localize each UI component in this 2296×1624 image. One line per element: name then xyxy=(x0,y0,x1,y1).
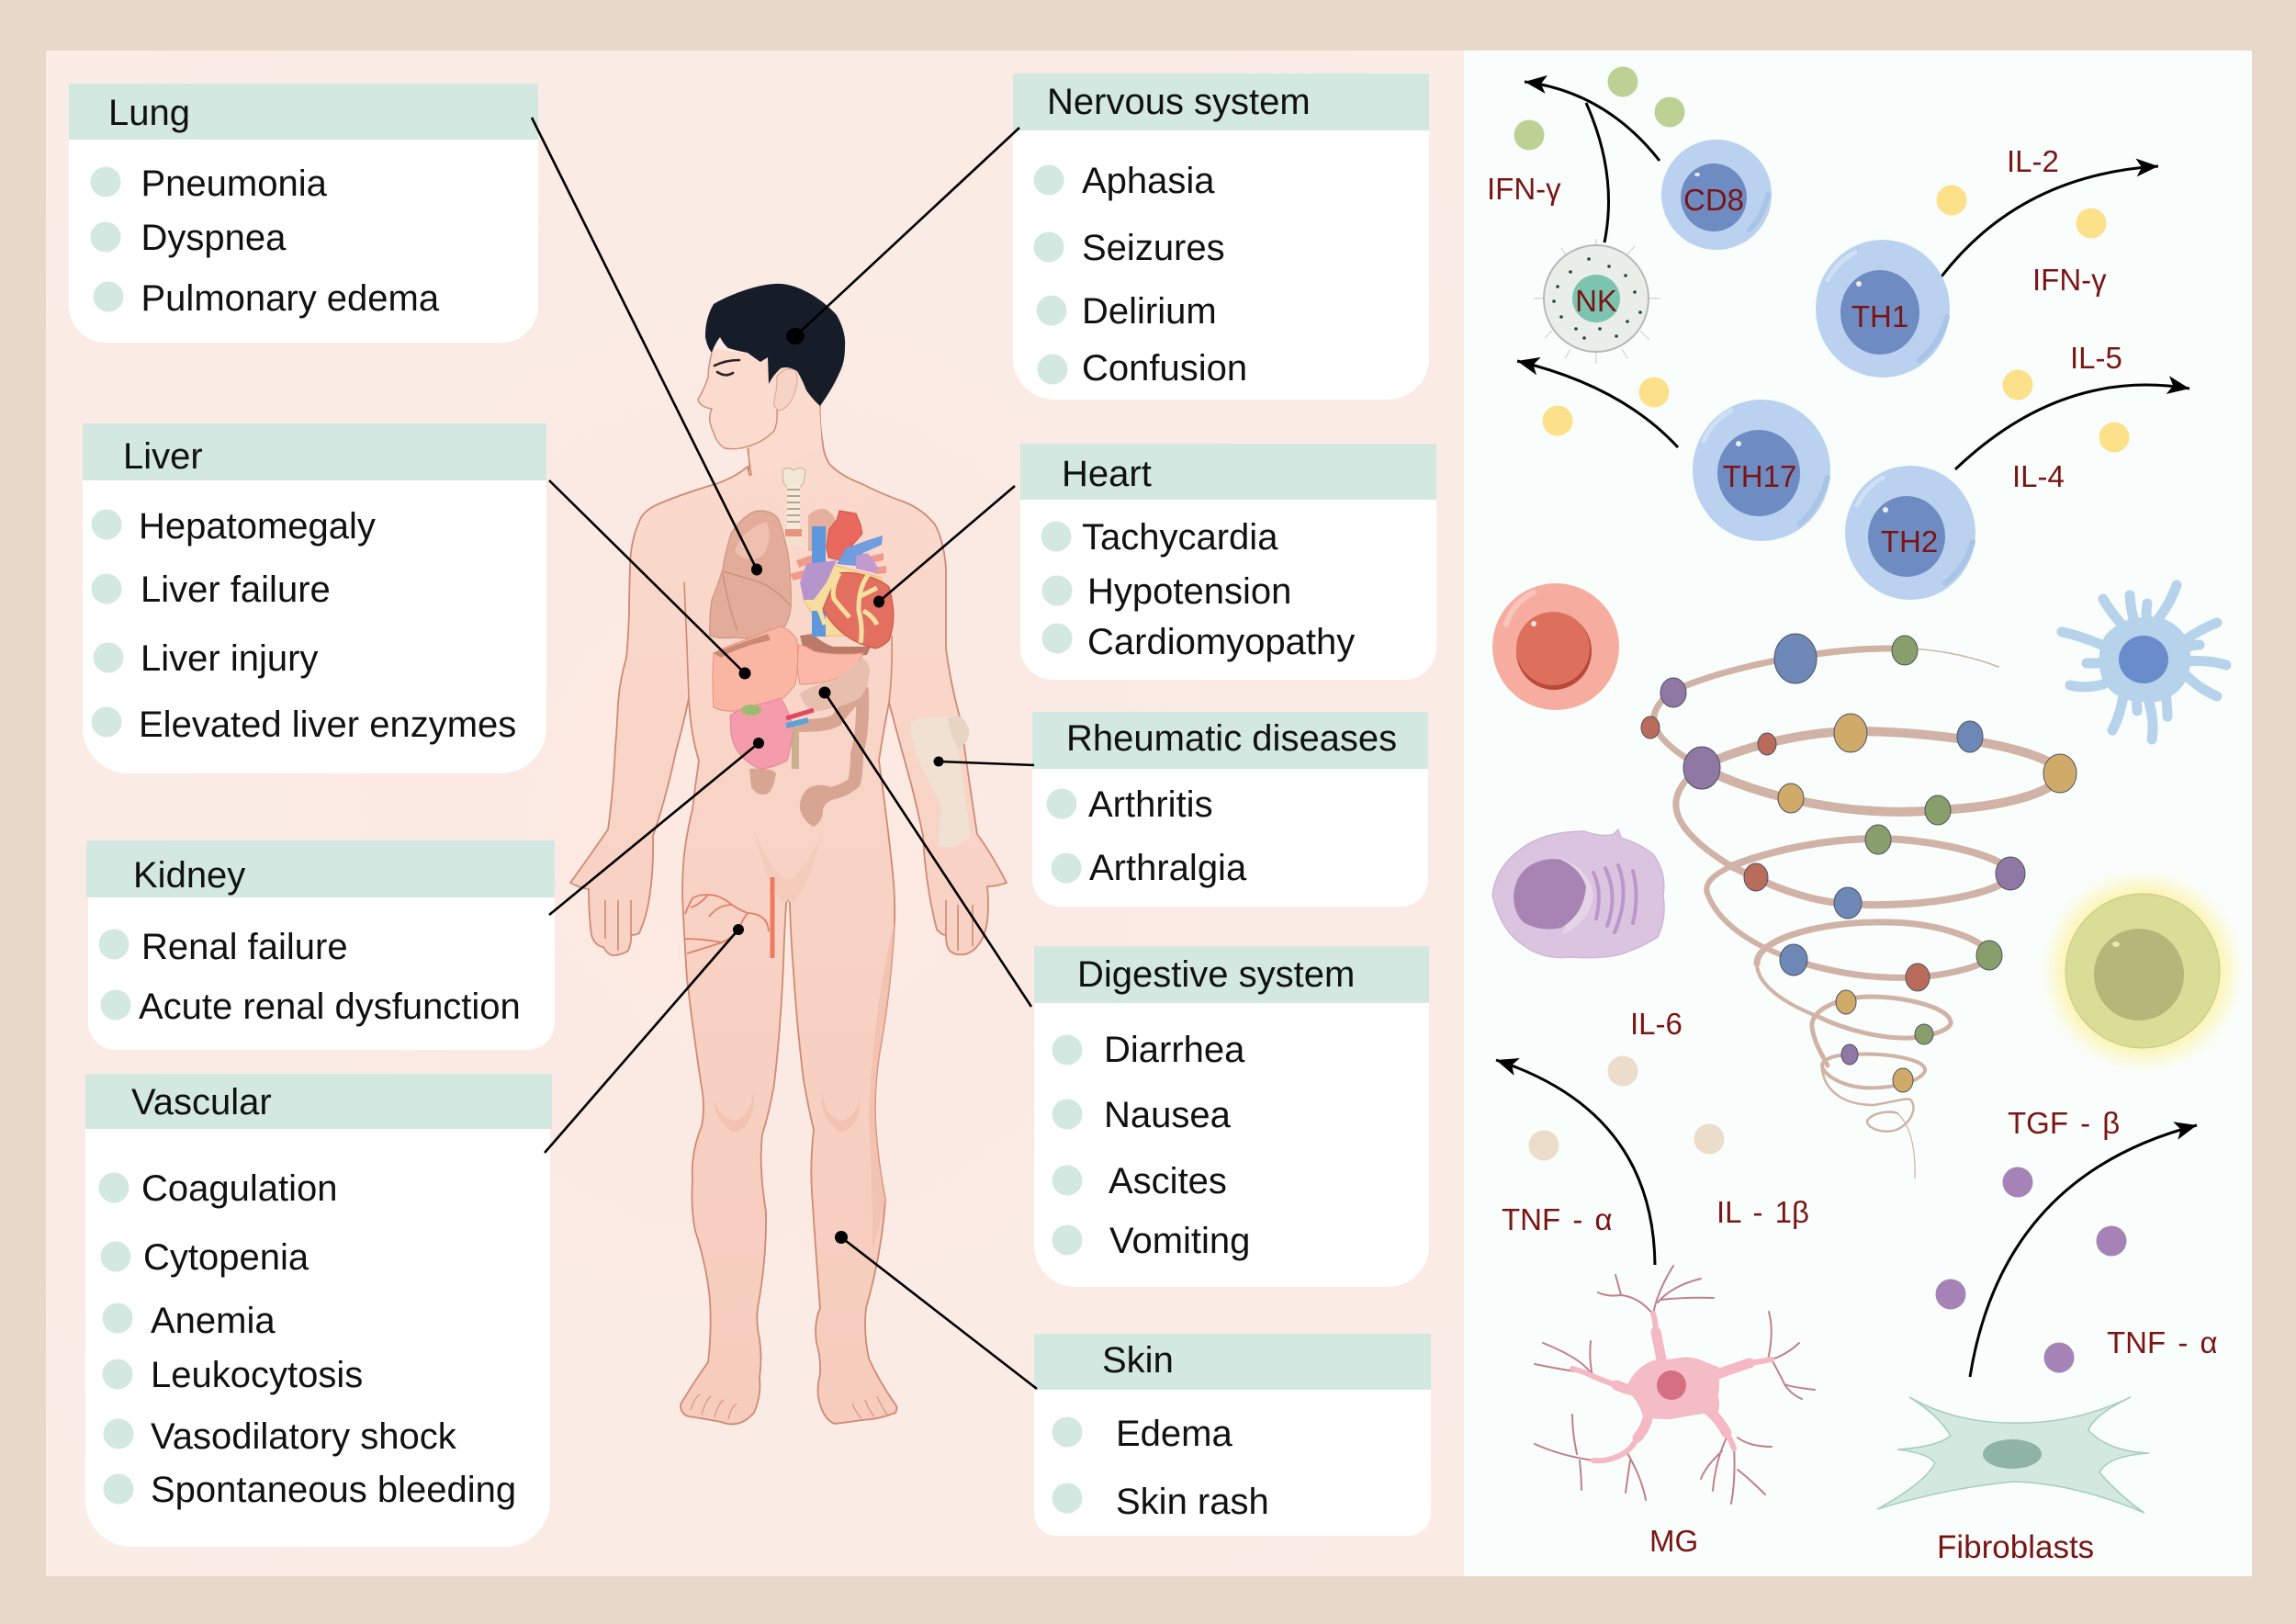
cell: CD8: CD8 xyxy=(1683,183,1744,217)
cytokine label: IFN-γ left: IFN-γ xyxy=(1487,172,1561,206)
card: Lung: Pulmonary edema xyxy=(141,278,440,319)
cytokine dots: beige xyxy=(1528,1056,1725,1161)
armpit and finger lines xyxy=(605,582,973,951)
kidney and vessels xyxy=(730,698,814,769)
card: Lung xyxy=(69,84,538,343)
card: Digestive system: Digestive system xyxy=(1077,954,1355,995)
cell: dendritic xyxy=(2062,585,2226,739)
card: Heart: Tachycardia xyxy=(1082,517,1278,558)
leg vessel xyxy=(685,877,775,958)
cell: TH17: TH17 xyxy=(1723,459,1796,493)
card: Vascular: Anemia xyxy=(151,1301,276,1341)
card: Nervous system: Confusion xyxy=(1082,348,1247,389)
card: Heart: Hypotension xyxy=(1087,571,1291,612)
card: Skin xyxy=(1034,1334,1431,1536)
neck fill xyxy=(748,404,822,473)
cell: NK: NK xyxy=(1575,284,1617,318)
card: Vascular: Leukocytosis xyxy=(151,1355,363,1395)
arrow: CD8 xyxy=(1525,82,1660,161)
card: Kidney: Kidney xyxy=(133,855,245,896)
card: Heart xyxy=(1020,444,1436,680)
card: Lung: Lung xyxy=(108,93,190,133)
arrow: NK xyxy=(1586,103,1609,242)
cytokine dots: purple xyxy=(1936,1167,2127,1372)
skin shading xyxy=(715,921,895,1249)
hair xyxy=(705,284,845,406)
leader line: Nervous system xyxy=(786,128,1019,344)
card: Kidney: Renal failure xyxy=(141,927,348,967)
card: Rheumatic diseases: Arthritis xyxy=(1088,784,1213,825)
cytokine label: IL-5: IL-5 xyxy=(2070,341,2122,375)
face profile xyxy=(698,353,777,449)
leader line: Liver xyxy=(549,480,751,680)
cell: MG neuron xyxy=(1535,1266,1815,1504)
cell: plasma xyxy=(1492,829,1664,958)
cell: fibroblast xyxy=(1877,1397,2149,1513)
liver xyxy=(713,626,871,711)
card: Nervous system xyxy=(1013,73,1429,400)
human body figure xyxy=(570,284,1007,1424)
cytokine label: TNF-α left: TNF - α xyxy=(1502,1202,1613,1236)
card: Lung: Dyspnea xyxy=(141,218,287,258)
cytokine label: IL-6: IL-6 xyxy=(1630,1007,1683,1041)
cytokine label: IL-2: IL-2 xyxy=(2007,144,2059,178)
toe lines xyxy=(691,1394,887,1419)
arrow: MG xyxy=(1496,1060,1655,1265)
ear xyxy=(774,369,797,411)
card: Heart: Cardiomyopathy xyxy=(1087,622,1355,662)
card: Heart: Heart xyxy=(1062,454,1152,494)
cytokine dots: yellow xyxy=(1543,186,2129,452)
lungs xyxy=(710,509,837,638)
cell: CD8 xyxy=(1661,140,1772,250)
arrow: Fibroblasts xyxy=(1970,1125,2197,1377)
cytokine label: TNF-α right: TNF - α xyxy=(2107,1325,2218,1359)
cell: TH1: TH1 xyxy=(1851,299,1908,333)
pelvis shading xyxy=(754,831,823,902)
card: Liver: Liver xyxy=(123,436,203,477)
card: Nervous system: Aphasia xyxy=(1082,161,1215,201)
cell: TH17 xyxy=(1693,400,1830,541)
leader line: Rheumatic diseases xyxy=(933,757,1034,766)
card: Digestive system: Diarrhea xyxy=(1104,1030,1245,1070)
card: Rheumatic diseases xyxy=(1032,712,1428,907)
trachea xyxy=(782,468,806,547)
bone on forearm xyxy=(910,716,971,848)
card: Vascular: Vascular xyxy=(131,1082,272,1122)
heart xyxy=(790,511,894,648)
spiral with beads xyxy=(1641,634,2077,1179)
card: Digestive system: Vomiting xyxy=(1109,1221,1250,1261)
card: Liver: Liver injury xyxy=(141,638,318,679)
card: Vascular: Coagulation xyxy=(141,1168,338,1209)
leader line: Kidney xyxy=(549,738,764,915)
card: Digestive system xyxy=(1034,946,1429,1287)
panel: organ manifestations background xyxy=(46,51,1464,1576)
card: Liver xyxy=(83,423,546,773)
card: Vascular: Cytopenia xyxy=(143,1237,310,1278)
card: Liver: Elevated liver enzymes xyxy=(139,705,516,745)
cell label: Fibroblasts: Fibroblasts xyxy=(1937,1529,2094,1565)
panel: immune cells background xyxy=(1464,51,2252,1576)
card: Nervous system: Seizures xyxy=(1082,228,1225,268)
cell: TH1 xyxy=(1816,240,1950,378)
arrow: TH17 xyxy=(1517,361,1678,447)
cell: TH2: TH2 xyxy=(1881,524,1938,558)
leader line: Heart xyxy=(873,486,1015,608)
cytokine dots: green xyxy=(1514,66,1684,151)
card: Nervous system: Nervous system xyxy=(1047,82,1311,122)
cell: NK xyxy=(1534,239,1660,364)
card: Kidney: Acute renal dysfunction xyxy=(139,987,521,1027)
cell: TH2 xyxy=(1845,466,1975,600)
cytokine label: IL-1β: IL - 1β xyxy=(1716,1195,1809,1229)
cytokine label: IL-4: IL-4 xyxy=(2012,459,2065,493)
leader line: Vascular xyxy=(545,924,744,1153)
card: Nervous system: Delirium xyxy=(1082,291,1217,332)
cell label: MG: MG xyxy=(1649,1524,1698,1558)
cell: red xyxy=(1492,583,1619,710)
card: Liver: Hepatomegaly xyxy=(139,506,376,547)
card: Vascular xyxy=(85,1074,552,1547)
card: Skin: Skin xyxy=(1102,1340,1174,1381)
card: Digestive system: Nausea xyxy=(1104,1095,1232,1135)
body silhouette xyxy=(570,404,1007,1424)
card: Lung: Pneumonia xyxy=(141,164,328,204)
cell: yellow glowing xyxy=(2040,868,2245,1074)
arrow: TH2 xyxy=(1955,385,2189,469)
card: Vascular: Spontaneous bleeding xyxy=(151,1470,516,1510)
card: Rheumatic diseases: Arthralgia xyxy=(1089,848,1247,888)
arrow: TH1 xyxy=(1941,166,2158,276)
cytokine label: TGF-β: TGF - β xyxy=(2008,1106,2120,1140)
eye and brow xyxy=(715,360,739,375)
colon and small bowel xyxy=(749,658,870,827)
leader line: Lung xyxy=(532,118,762,575)
neck line xyxy=(748,448,751,476)
card: Skin: Skin rash xyxy=(1116,1482,1269,1522)
card: Skin: Edema xyxy=(1116,1414,1232,1454)
head skin xyxy=(698,349,820,449)
leader line: Skin xyxy=(835,1231,1037,1389)
card: Digestive system: Ascites xyxy=(1109,1161,1227,1201)
cytokine label: IFN-γ right: IFN-γ xyxy=(2032,263,2107,297)
card: Kidney xyxy=(86,840,555,1050)
card: Liver: Liver failure xyxy=(141,570,331,610)
card: Vascular: Vasodilatory shock xyxy=(151,1416,457,1457)
leader line: Digestive system xyxy=(819,687,1031,1007)
card: Rheumatic diseases: Rheumatic diseases xyxy=(1066,718,1397,759)
